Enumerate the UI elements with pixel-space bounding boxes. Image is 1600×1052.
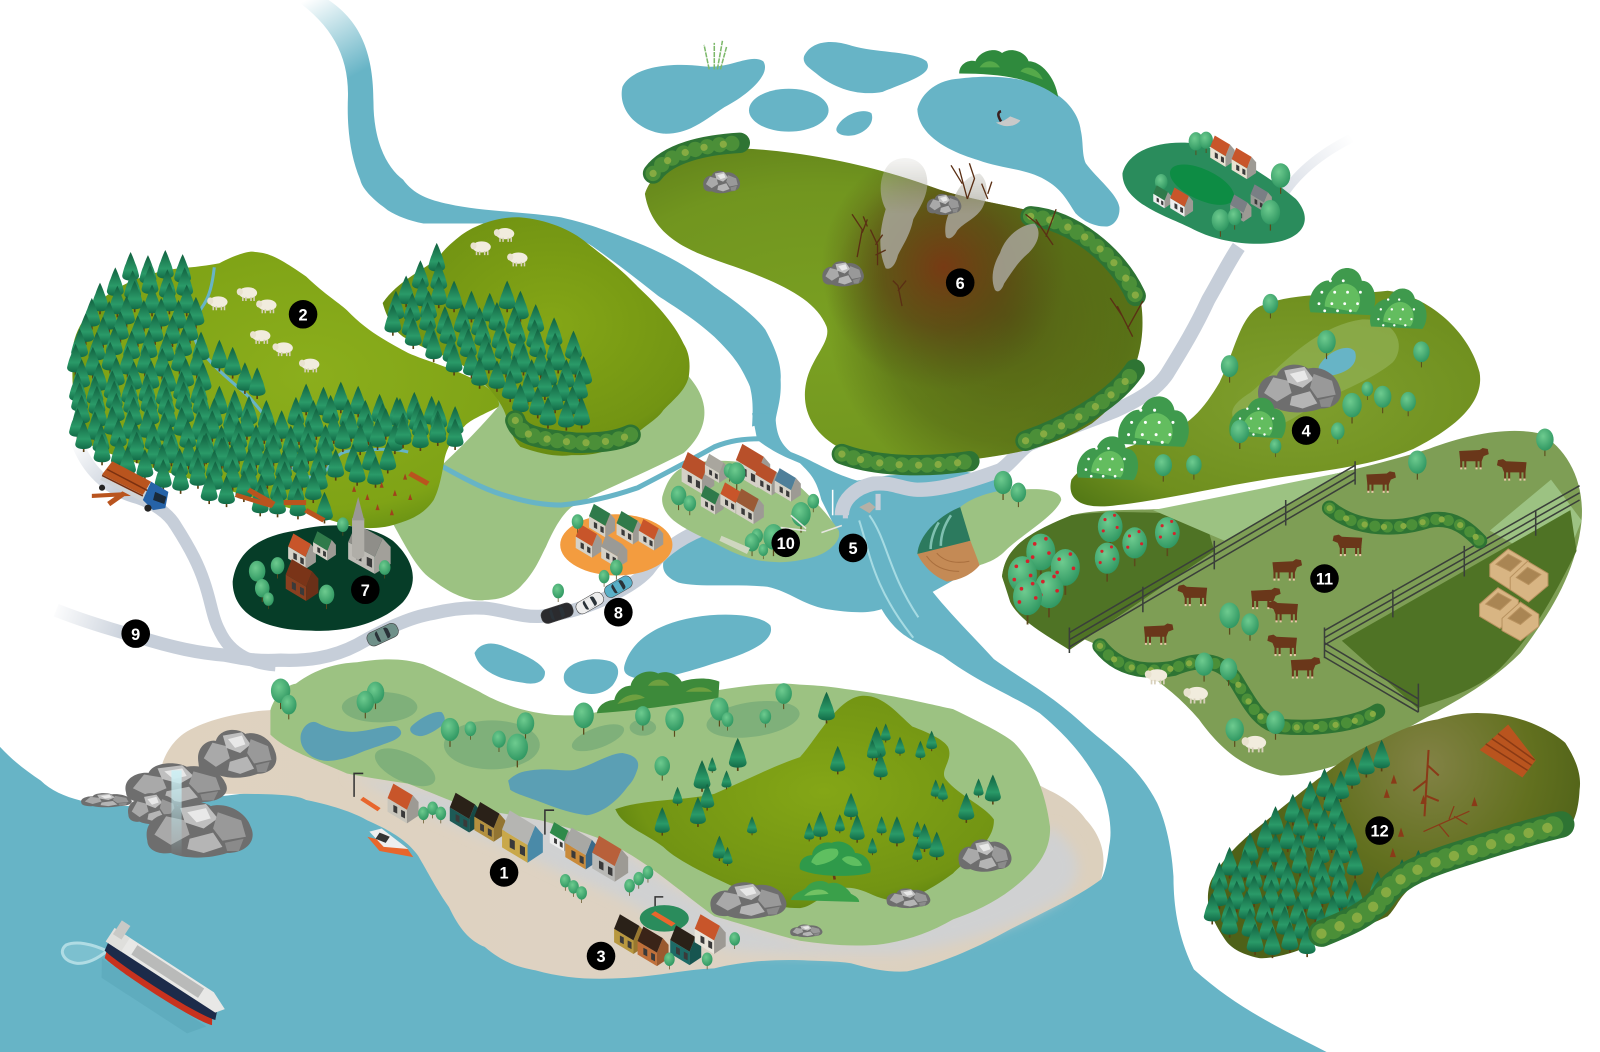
rocks and waterfall: headland (81, 730, 276, 858)
water: delta, lower river and sea (0, 413, 1327, 1052)
cars (365, 574, 634, 648)
sheep (1145, 669, 1266, 752)
houses (388, 784, 419, 823)
badge 9 (121, 619, 150, 648)
ponds: upper wetlands (622, 42, 1119, 227)
panel: hamlet green (1122, 132, 1305, 244)
badge 3: 3 (596, 948, 606, 966)
bush: wetland copse (597, 671, 719, 713)
hill: coastal (615, 696, 994, 908)
dead trees (852, 163, 1143, 337)
hedges on hill 6 (653, 143, 1136, 465)
field plot: contour strips (917, 471, 1061, 582)
badge 4: 4 (1302, 423, 1311, 441)
hedges (1100, 508, 1480, 727)
panel: orange village (552, 504, 672, 602)
church (348, 497, 391, 574)
badge 2: 2 (299, 306, 308, 324)
badge 12 (1365, 816, 1394, 845)
badge 10: 10 (777, 535, 795, 553)
panel: clear-felled forest (1204, 713, 1580, 958)
duck (996, 111, 1020, 126)
hill 6: degraded upland (643, 143, 1153, 480)
rocks on hill 6 (703, 171, 961, 287)
sand beach (161, 710, 1104, 979)
light pasture wedges (1153, 471, 1582, 571)
lone tree and fallen tree (1413, 750, 1469, 837)
badge 1: 1 (500, 865, 509, 883)
badge 1 (490, 858, 518, 887)
badge 7 (351, 575, 380, 604)
badge 5 (839, 534, 867, 562)
badge 2 (289, 300, 317, 329)
ship (88, 919, 235, 1043)
hill 2b: upland pasture valley (393, 369, 704, 600)
hill 2: plantation (72, 252, 499, 528)
badge 9: 9 (131, 626, 140, 644)
dark paddock (1342, 510, 1577, 708)
badge 10 (771, 529, 800, 557)
badge 11: 11 (1316, 571, 1333, 589)
truck (99, 461, 168, 512)
badge 6 (946, 268, 974, 297)
logs and stumps (92, 471, 430, 522)
stream: valley (408, 439, 760, 505)
boat: harbour (367, 829, 413, 857)
tree: riverside sapling (832, 490, 834, 515)
badge 8 (604, 598, 633, 627)
road: main road (56, 138, 1352, 665)
trees: coastal meadow (271, 679, 792, 781)
pasture trees (1195, 429, 1554, 747)
forest: second plantation (384, 243, 592, 431)
rocks: coastal hill (710, 839, 1012, 937)
cows (1144, 448, 1527, 679)
benches (360, 797, 381, 811)
wetland pools (301, 712, 638, 815)
coastal meadow (270, 659, 1050, 946)
hedge (1321, 824, 1561, 934)
panel: farmland (1002, 429, 1582, 775)
boat wake (859, 515, 918, 638)
town trees (418, 807, 429, 823)
badge 6: 6 (956, 275, 965, 293)
lamps (354, 773, 663, 916)
forest: left plantation (67, 250, 464, 523)
badge 12: 12 (1371, 823, 1389, 841)
badge 5: 5 (849, 540, 858, 558)
promenade band (347, 773, 1078, 954)
stumps (1384, 774, 1478, 878)
panel: riverside village (662, 444, 842, 562)
hill 4: restored upland (1070, 268, 1480, 506)
crates (1480, 549, 1548, 641)
piers (843, 494, 881, 518)
trees: coastal conifers (655, 692, 1001, 866)
fences (1069, 461, 1580, 712)
tree: broadleaf with bush (791, 842, 871, 902)
panel: church green (233, 497, 413, 631)
badge 8: 8 (614, 604, 623, 622)
river: upper channel (296, 0, 781, 427)
orchard plot (1002, 512, 1214, 650)
stream: hillside (193, 267, 408, 478)
badge 11 (1310, 564, 1339, 593)
hedge: second hill toe (515, 420, 631, 443)
wake swirl (62, 943, 107, 963)
log stack (1480, 724, 1536, 778)
ponds: lower wetlands (474, 615, 771, 694)
hill 2b (383, 217, 690, 456)
town: promenade (354, 773, 740, 969)
smoke plumes (880, 158, 1039, 291)
apple trees (1008, 511, 1180, 624)
badge 7: 7 (361, 582, 370, 600)
bush: top pond copse (959, 50, 1058, 97)
sheep: hill 2 (207, 228, 528, 372)
conifers (1204, 740, 1427, 958)
badge 3 (587, 942, 615, 970)
reed plant (704, 41, 727, 69)
boat: river (859, 502, 876, 513)
meadow patches (342, 692, 802, 794)
badge 4 (1292, 416, 1320, 445)
